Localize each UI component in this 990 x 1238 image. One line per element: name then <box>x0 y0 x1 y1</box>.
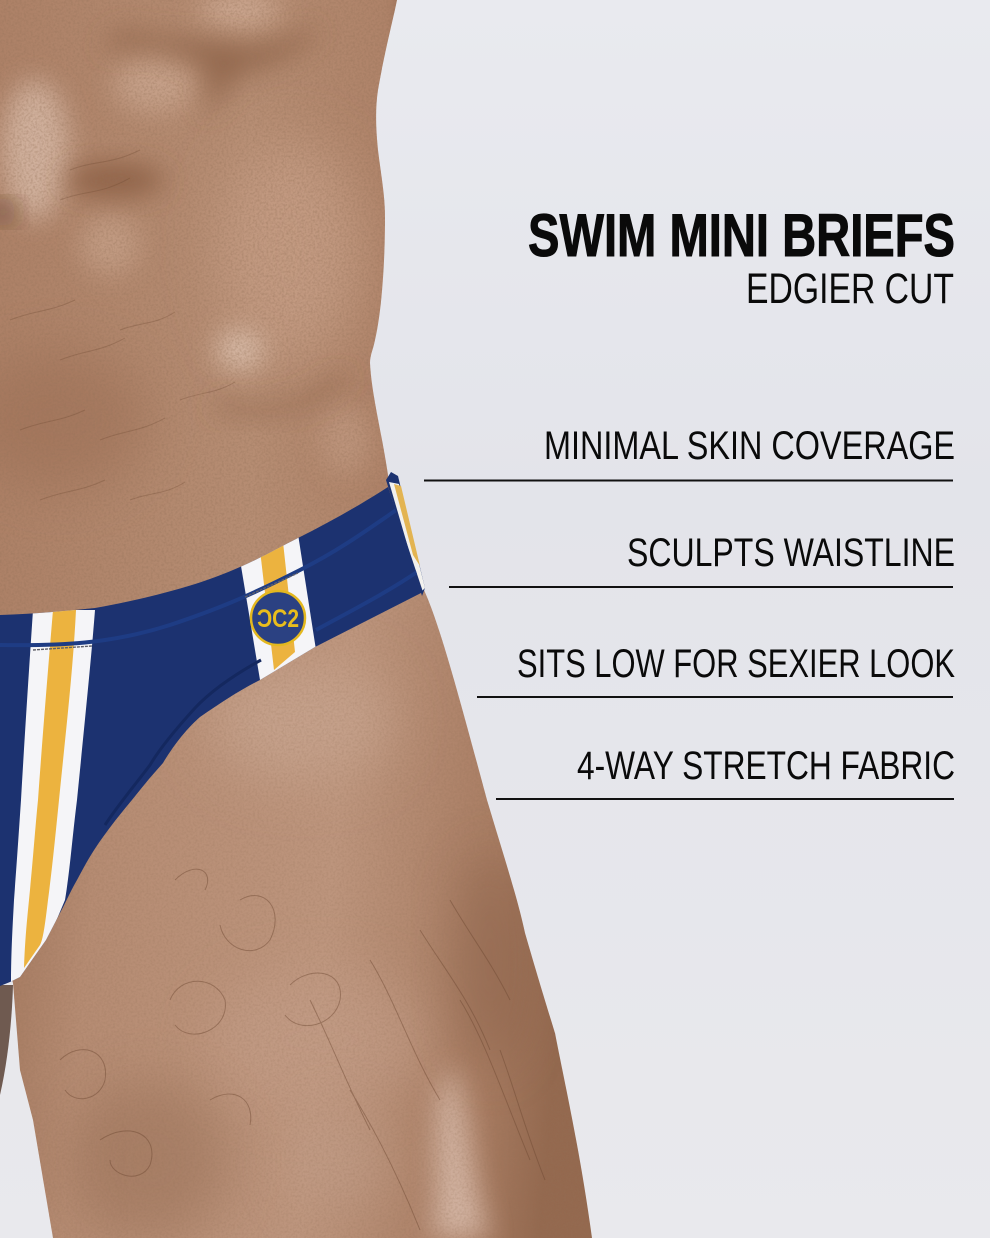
leg seam <box>316 570 420 630</box>
icon: logo badge: ƆC2 <box>257 605 299 633</box>
panel: swim brief <box>0 470 430 990</box>
center white stripes <box>11 610 95 985</box>
brief body <box>0 470 430 990</box>
waistband seam <box>0 506 402 645</box>
hip yellow stripe <box>260 542 295 670</box>
panel: rear leg sliver <box>0 985 13 1095</box>
panel: thigh <box>0 590 600 1238</box>
icon: logo badge <box>251 591 305 645</box>
center yellow stripe <box>24 610 76 968</box>
panel: torso <box>0 0 420 640</box>
side tab at hip <box>386 472 425 596</box>
feature list <box>424 424 955 800</box>
hip white stripes <box>240 534 316 686</box>
heading <box>528 202 955 313</box>
leg hair <box>60 869 545 1230</box>
body hair <box>10 150 235 500</box>
